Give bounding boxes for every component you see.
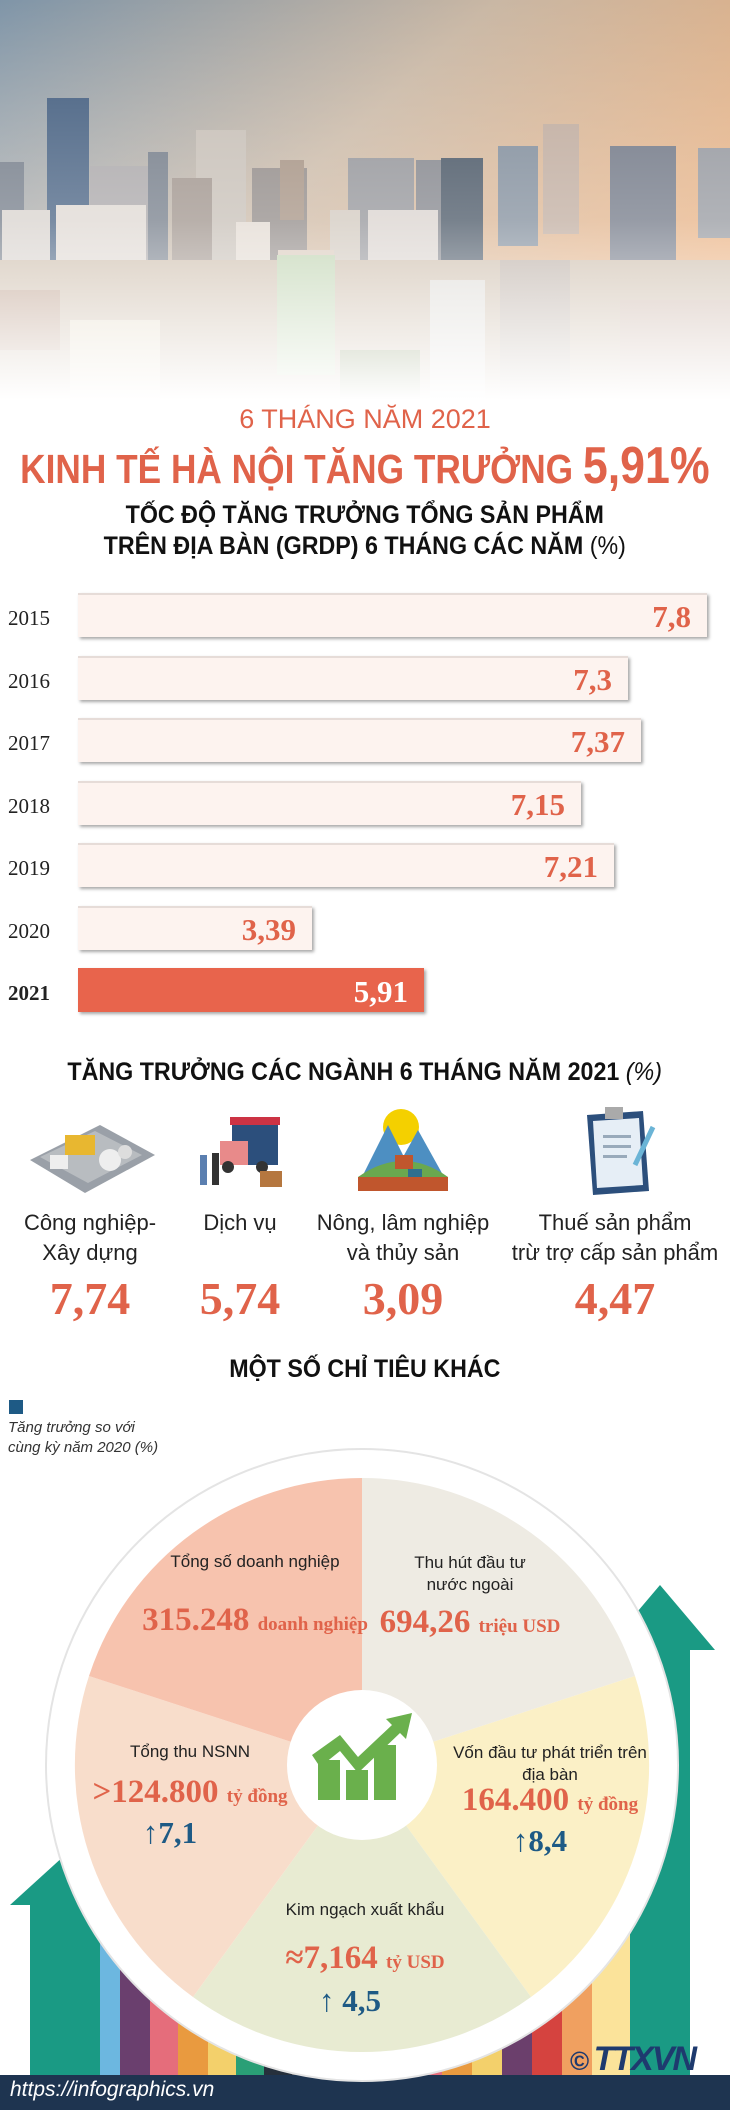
legend: cùng kỳ năm 2020 (%) [8, 1439, 158, 1456]
chart heading: TỐC ĐỘ TĂNG TRƯỞNG TỔNG SẢN PHẨM [126, 501, 604, 529]
slice: FDI [380, 1553, 560, 1640]
growth: 8,4: ↑8,4 [513, 1823, 567, 1858]
bar chart: GRDP: 5,91 [354, 974, 408, 1009]
icon: farm landscape [358, 1109, 448, 1191]
slice: development investment: 164.400 tỷ đồng [462, 1782, 638, 1818]
bar chart: GRDP: 7,15 [511, 787, 565, 822]
pie diagram: indicators [45, 1448, 679, 2082]
sector: agriculture: 3,09 [363, 1273, 443, 1324]
slice: FDI: nước ngoài [427, 1575, 513, 1594]
slice: FDI: Thu hút đầu tư [414, 1553, 526, 1572]
sector: industry [24, 1125, 156, 1324]
slice: budget revenue: >124.800 tỷ đồng [92, 1774, 288, 1810]
bar chart: GRDP: 2017 [8, 731, 50, 755]
sector: services: 5,74 [200, 1273, 280, 1324]
header photo: Hanoi skyline [0, 0, 730, 386]
sector: services: Dịch vụ [203, 1210, 277, 1235]
bar chart: GRDP: 2019 [8, 856, 50, 880]
slice: exports [285, 1900, 445, 2018]
bar chart: GRDP: 7,8 [652, 599, 691, 634]
icon: delivery truck [200, 1117, 282, 1187]
sector: product tax: trừ trợ cấp sản phẩm [512, 1240, 718, 1265]
legend [8, 1400, 158, 1456]
sector: industry: 7,74 [50, 1273, 130, 1324]
bar chart: GRDP: 2015 [8, 606, 50, 630]
icon: clipboard [587, 1107, 656, 1195]
subtitle: 6 THÁNG NĂM 2021 [239, 404, 491, 434]
sector heading: TĂNG TRƯỞNG CÁC NGÀNH 6 THÁNG NĂM 2021 (%) [68, 1058, 662, 1086]
bar chart: GRDP: 2018 [8, 794, 50, 818]
slice: exports: Kim ngạch xuất khẩu [286, 1900, 444, 1919]
logo: TTXVN: © TTXVN [570, 2040, 695, 2078]
legend: Tăng trưởng so với [8, 1419, 135, 1436]
sector: product tax: Thuế sản phẩm [539, 1210, 691, 1235]
slice: exports: ≈7,164 tỷ USD [285, 1940, 445, 1976]
bar chart: GRDP [8, 593, 711, 1016]
sector: industry: Công nghiệp- [24, 1210, 156, 1235]
bar chart: GRDP: 2021 [8, 981, 50, 1005]
icon: growth chart [312, 1713, 412, 1800]
bar chart: GRDP: 3,39 [242, 912, 296, 947]
background: colored bars and arrows [0, 1585, 730, 2110]
bar chart: GRDP: 7,21 [544, 849, 598, 884]
sector: product tax [512, 1107, 718, 1324]
sector: product tax: 4,47 [575, 1273, 655, 1324]
sector: industry: Xây dựng [42, 1240, 138, 1265]
sector: services [200, 1117, 282, 1324]
section heading: other indicators: MỘT SỐ CHỈ TIÊU KHÁC [229, 1355, 501, 1383]
sector: agriculture: và thủy sản [347, 1240, 459, 1265]
slice: development investment: Vốn đầu tư phát triển trên [453, 1743, 647, 1762]
bar chart: GRDP: 2020 [8, 919, 50, 943]
growth: 4,5: ↑ 4,5 [319, 1983, 381, 2018]
slice: enterprises: Tổng số doanh nghiệp [170, 1552, 340, 1571]
bar chart: GRDP: 7,3 [573, 662, 612, 697]
chart heading: TRÊN ĐỊA BÀN (GRDP) 6 THÁNG CÁC NĂM (%) [104, 532, 626, 560]
main title: KINH TẾ HÀ NỘI TĂNG TRƯỞNG 5,91% [20, 437, 710, 495]
bar chart: GRDP: 2016 [8, 669, 50, 693]
sector: agriculture [317, 1109, 489, 1324]
slice: FDI: 694,26 triệu USD [380, 1604, 560, 1640]
slice: development investment [453, 1743, 647, 1858]
icon: factory [30, 1125, 155, 1193]
footer url: https://infographics.vn [10, 2078, 214, 2101]
slice: budget revenue: Tổng thu NSNN [130, 1742, 250, 1761]
bar chart: GRDP: 7,37 [571, 724, 625, 759]
chart heading [104, 500, 626, 560]
slice: enterprises: 315.248 doanh nghiệp [142, 1602, 368, 1638]
slice: enterprises [142, 1552, 368, 1638]
slice: budget revenue [92, 1742, 288, 1850]
growth: 7,1: ↑7,1 [143, 1815, 197, 1850]
sector: agriculture: Nông, lâm nghiệp [317, 1210, 489, 1235]
slice: development investment: địa bàn [522, 1765, 578, 1784]
